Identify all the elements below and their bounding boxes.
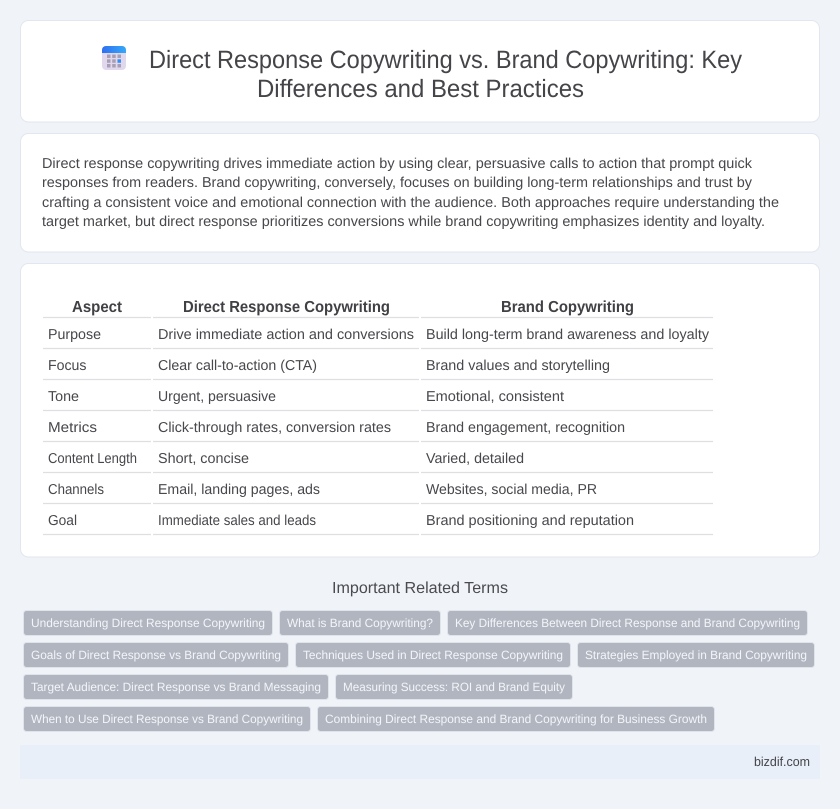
title: Direct Response Copywriting vs. Brand Copywriting: Key xyxy=(149,46,742,74)
tag: What is Brand Copywriting? xyxy=(287,616,433,630)
footer: bizdif.com xyxy=(754,754,810,769)
table row: goal: Immediate sales and leads xyxy=(158,513,316,529)
table row: goal: Goal xyxy=(48,513,77,529)
table row: content length: Varied, detailed xyxy=(426,451,524,467)
table row: purpose: Purpose xyxy=(48,327,101,343)
table row: metrics: Metrics xyxy=(48,420,97,436)
table row: content length: Content Length xyxy=(48,451,137,467)
title: Differences and Best Practices xyxy=(257,75,584,103)
tag xyxy=(24,706,310,732)
panel: introduction xyxy=(20,134,820,252)
table row: focus: Focus xyxy=(48,358,86,374)
table row: channels: Email, landing pages, ads xyxy=(158,482,320,498)
tag: Techniques Used in Direct Response Copywriting xyxy=(303,648,563,662)
tag xyxy=(296,642,570,668)
table row: metrics xyxy=(48,420,625,436)
text block: introduction paragraph: Direct response copywriting drives immediate action by using clear, persuasive calls to action that prompt quick xyxy=(42,156,753,172)
tag xyxy=(336,674,572,700)
tag: Key Differences Between Direct Response and Brand Copywriting xyxy=(455,616,800,630)
tag xyxy=(448,610,808,636)
related terms tags xyxy=(24,610,814,732)
tag: Combining Direct Response and Brand Copywriting for Business Growth xyxy=(325,712,707,726)
text block: introduction paragraph: crafting a consistent voice and emotional connection with the audience. Both approaches require understanding the xyxy=(42,195,779,211)
table row: focus: Clear call-to-action (CTA) xyxy=(158,358,317,374)
table row: purpose: Drive immediate action and conversions xyxy=(158,327,414,343)
table row: channels: Channels xyxy=(48,482,104,498)
table header: Direct Response Copywriting xyxy=(183,299,390,316)
table row: metrics: Brand engagement, recognition xyxy=(426,420,625,436)
table row: tone xyxy=(48,389,564,405)
table row: focus xyxy=(48,358,610,374)
icon: calendar xyxy=(102,46,126,70)
table header: Brand Copywriting xyxy=(501,299,634,316)
tag: Goals of Direct Response vs Brand Copywriting xyxy=(31,648,281,662)
title xyxy=(149,46,742,103)
table header: Aspect xyxy=(72,299,123,316)
table row: content length xyxy=(48,451,524,467)
panel: title header xyxy=(20,20,820,122)
table row: purpose: Build long-term brand awareness and loyalty xyxy=(426,327,710,343)
text block: introduction paragraph xyxy=(42,156,779,230)
text block: introduction paragraph: target market, but direct response prioritizes conversions while brand copywriting emphasizes identity and loyalty. xyxy=(42,214,765,230)
table row: goal: Brand positioning and reputation xyxy=(426,513,634,529)
tag xyxy=(24,674,328,700)
tag: When to Use Direct Response vs Brand Copywriting xyxy=(31,712,303,726)
tag xyxy=(578,642,814,668)
table row: metrics: Click-through rates, conversion rates xyxy=(158,420,391,436)
tag xyxy=(24,610,272,636)
tag: Target Audience: Direct Response vs Brand Messaging xyxy=(31,680,321,694)
table row: content length: Short, concise xyxy=(158,451,249,467)
tag xyxy=(24,642,288,668)
tag: Strategies Employed in Brand Copywriting xyxy=(585,648,807,662)
table row: goal xyxy=(48,513,634,529)
tag xyxy=(280,610,440,636)
table row: purpose xyxy=(48,327,710,343)
panel: comparison table xyxy=(20,264,820,557)
tag: Measuring Success: ROI and Brand Equity xyxy=(343,680,565,694)
tag: Understanding Direct Response Copywriting xyxy=(31,616,265,630)
tag xyxy=(318,706,714,732)
table row: channels: Websites, social media, PR xyxy=(426,482,597,498)
heading: important related terms: Important Related Terms xyxy=(332,580,508,597)
table row: channels xyxy=(48,482,597,498)
table header xyxy=(72,299,634,316)
text block: introduction paragraph: responses from readers. Brand copywriting, conversely, focuses on building long-term relationships and trust by xyxy=(42,175,753,191)
table row: focus: Brand values and storytelling xyxy=(426,358,610,374)
table row: tone: Urgent, persuasive xyxy=(158,389,276,405)
footer xyxy=(20,745,820,779)
table row: tone: Tone xyxy=(48,389,79,405)
table row: tone: Emotional, consistent xyxy=(426,389,564,405)
